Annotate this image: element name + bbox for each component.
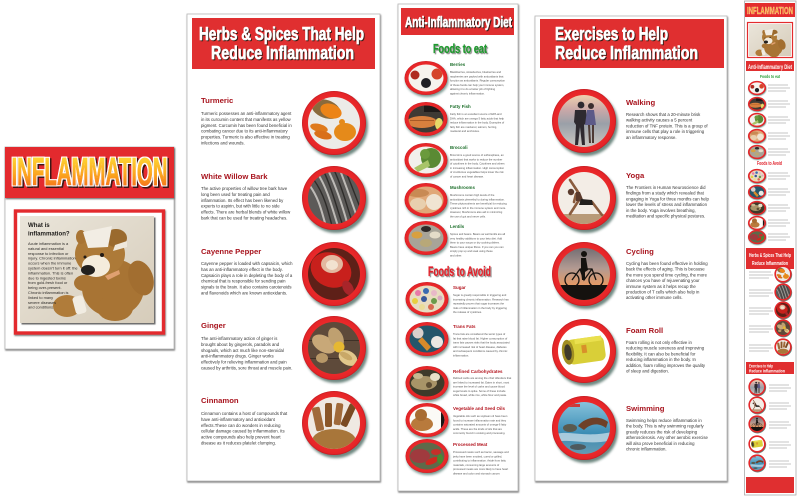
item: walking: reduction of TNF protein. This is a group of (626, 123, 708, 128)
item: broccoli: of cruciferous vegetables helps lower the risk (450, 170, 504, 174)
item: refined carbohydrates: white bread, white rice, white flour and pasta. (453, 393, 507, 397)
text: what is inflammation: Chronic inflammation is (28, 290, 68, 295)
item: trans fats: fat that raise blood fat. Higher consumption of (453, 336, 507, 340)
item: berries: Berries (450, 62, 466, 67)
thumbnail header: exercises: Reduce Inflammation (749, 368, 785, 374)
item: walking: Research shows that a 20-minute brisk (626, 112, 701, 117)
item: broccoli: of cancer and heart disease. (450, 174, 484, 178)
item: fatty fish: Fatty Fish (450, 104, 471, 109)
item: mushrooms (404, 183, 507, 219)
item: turmeric: combating cancer due to its anti-inflammatory (201, 129, 289, 134)
item: turmeric: Turmeric possesses an anti-inflammatory agent (201, 111, 292, 116)
item: cinnamon: effects.These can do wonders in reducing (201, 423, 281, 428)
item: fatty fish: Fatty fish is an excellent source of EPA and (450, 112, 502, 116)
item: berries: Blackberries, strawberries, blueberries and (450, 70, 501, 74)
item: foam roll: addition, foam rolling improves the quality (626, 363, 706, 368)
item: lentils: Beans have unique fibres. If you can you can (450, 245, 504, 249)
item: mushrooms: antioxidants phenethyl to during inflammation. (450, 197, 505, 201)
item: cinnamon (201, 391, 368, 458)
item: swimming: Swimming helps reduce inflammation in (626, 418, 702, 423)
item: refined carbohydrates: Refined carbs are among the chief offenders that (453, 376, 511, 380)
item: broccoli: Broccoli is a good source of sulforaphane, an (450, 153, 504, 157)
panel: anti-inflammatory diet (398, 4, 518, 491)
item: foam roll: reducing muscle soreness and improving (626, 346, 705, 351)
thumbnail: herb circles (749, 265, 792, 356)
item: sugar: repeatedly proven that sugar increases the (453, 302, 504, 306)
item: yoga: lower the levels of stress and inflammation (626, 202, 708, 207)
header band: exercises: Exercises to Help (555, 24, 668, 44)
item: broccoli: of cytokines in the body. Cytokines and others (450, 162, 505, 166)
item: ginger: effectively for relieving inflammation and pain (201, 360, 287, 365)
text: what is inflammation: response to infection or (28, 251, 69, 256)
item: foam roll: reducing inflammation in the body. In (626, 357, 697, 362)
item: sugar: increasing chronic inflammation. Research has (453, 297, 509, 301)
item: mushrooms: the use of gut and nerve cells. (450, 214, 486, 218)
item: foam roll: Foam Roll (626, 326, 663, 335)
item: foam roll (552, 319, 706, 386)
text: what is inflammation: inflammation. This is often (28, 270, 73, 275)
item: refined carbohydrates: Refined Carbohydrates (453, 369, 503, 374)
item: vegetable and seed oils: Vegetable oils such as soybean oil have been (453, 414, 508, 418)
item: cycling: the more you spend time cycling, the more (626, 272, 708, 277)
item: mushrooms: Mushrooms contain high levels of the (450, 193, 495, 197)
item: vegetable and seed oils: Vegetable and Seed Oils (453, 406, 506, 411)
item: white willow bark: bark that can be used for treating headaches. (201, 216, 287, 220)
item: cinnamon: cellular damage caused by inflammation. Its (201, 429, 285, 434)
item: vegetable and seed oils: acids. These are the kinds of oils that are (453, 427, 502, 431)
item: white willow bark (201, 166, 368, 233)
item: white willow bark: long been used for treating pain and (201, 192, 270, 197)
item: foam roll: Foam rolling is not only effective in (626, 340, 692, 345)
item: processed meat: disease and colon and stomach cancer. (453, 472, 500, 476)
thumbnail: foods to avoid ovals (748, 169, 790, 245)
thumbnail header: exercises (746, 362, 794, 374)
item: swimming (552, 396, 709, 463)
panel: inflammation poster (5, 147, 174, 349)
item: cayenne pepper: Capsaicin plays a role in depleting the body of a (201, 273, 293, 278)
item: cycling: activating other immune cells. (626, 295, 683, 300)
thumbnail: foods to eat ovals (748, 81, 790, 160)
header band: herbs and spices: Herbs & Spices That Help (199, 24, 364, 44)
text: what is inflammation: Acute inflammation is a (28, 241, 69, 246)
item: white willow bark: experts to aspirin, but with little to no side (201, 204, 280, 209)
item: refined carbohydrates: sugar levels to spike. Some of these include (453, 389, 506, 393)
item: lentils: them to your soups or dry cooking dishes. (450, 241, 500, 245)
item: swimming: the body. This is why swimming regularly (626, 424, 705, 429)
item: turmeric: properties. Turmeric is also effective in treating (201, 135, 290, 140)
item: ginger: Ginger (201, 321, 226, 330)
item: broccoli: antioxidant that works to reduce the number (450, 157, 502, 161)
item: trans fats: with increased risk of heart disease, diabetes (453, 345, 507, 349)
header band: diet (401, 8, 514, 35)
item: fatty fish (404, 102, 504, 138)
thumbnail heading: foods to eat: Foods to eat (760, 74, 780, 79)
item: processed meat: Processed Meat (453, 442, 488, 447)
item: berries: function as antioxidants. Regular consumption (450, 79, 505, 83)
text: what is inflammation: inflammation? (28, 230, 70, 237)
heading: foods to eat: Foods to eat (433, 42, 488, 56)
item: yoga: The Frontiers in Human Neuroscience did (626, 185, 706, 190)
item: mushrooms: However, Mushrooms also aid in minimizing (450, 210, 503, 214)
item: broccoli: in increasing inflammation. High consumption (450, 166, 505, 170)
item: cinnamon: Cinnamon (201, 396, 239, 405)
item: walking (552, 89, 708, 156)
text: what is inflammation: occurs when the immune (28, 261, 71, 266)
item: foam roll: of sleep and digestion. (626, 368, 669, 374)
item: berries (404, 61, 505, 97)
thumbnail header: herbs (746, 248, 794, 269)
header band: inflammation (5, 147, 174, 198)
item: cinnamon: Cinnamon contains a host of compounds that (201, 411, 288, 416)
text: what is inflammation: natural and essential (28, 246, 64, 251)
item: walking: Walking (626, 98, 655, 107)
item: refined carbohydrates (406, 366, 511, 402)
item: mushrooms: cytokines rich in the immune system and more. (450, 206, 506, 210)
item: cycling: chances you have of rejuvenating your (626, 278, 700, 283)
item: lentils: very healthy additions to your keto diet. Add (450, 236, 502, 240)
item: processed meat: Processed meats such as bacon, sausage and (453, 450, 509, 454)
item: cycling: Cycling has been found effective in holding (626, 261, 708, 266)
item: sugar: Sugar (453, 285, 466, 290)
thumbnail heading: foods to avoid: Foods to Avoid (757, 161, 782, 167)
thumbnail header: exercises: Exercises to Help (749, 364, 773, 368)
item: ginger: The anti-inflammatory action of ginger is (201, 336, 277, 341)
item: turmeric: pigment. Curcumin has been found beneficial in (201, 123, 292, 128)
item: cycling (552, 242, 708, 309)
text: what is inflammation: due to ingested toxins (28, 275, 66, 280)
item: berries: of these foods can help your immune system, (450, 83, 504, 87)
item: foam roll: flexibility. It can also be beneficial for (626, 351, 696, 356)
header band: herbs and spices (192, 18, 375, 69)
item: mushrooms: These phytonutrients are beneficial for reducing (450, 202, 507, 206)
item: walking: an inflammatory response. (626, 135, 677, 140)
item: cayenne pepper: signals to the brain. It also contains carotenoids (201, 285, 292, 290)
item: ginger: caused by arthritis, sore throat and muscle pain. (201, 366, 292, 370)
item: cycling: back the effects of aging. This is because (626, 267, 705, 272)
item: white willow bark: White Willow Bark (201, 172, 268, 181)
item: swimming: atherosclerosis. Any other aerobic exercise (626, 435, 709, 440)
item: lentils: Spices and beans. Beans as well lentils are all (450, 232, 506, 236)
thumbnail: exercise circles (748, 378, 791, 472)
item: berries: allowing it to do a better job of fighting (450, 87, 496, 91)
item: fatty fish: DHA, which are omega-3 fatty acids that help (450, 116, 504, 120)
item: vegetable and seed oils: found to increase inflammation rate and they (453, 418, 507, 422)
text: what is inflammation: linked to many (28, 295, 53, 300)
item: cayenne pepper: Cayenne Pepper (201, 247, 261, 256)
header band: diet: Anti-Inflammatory Diet (405, 14, 512, 31)
item: lentils: Lentils (450, 224, 465, 229)
text: what is inflammation: and conditions. (28, 305, 54, 310)
item: processed meat: jerky have been smoked, cured or grilled, (452, 454, 502, 458)
icon: bandaged teddy bear (53, 226, 158, 321)
item: mushrooms: Mushrooms (450, 185, 475, 190)
item: trans fats: Trans Fats (453, 324, 476, 329)
item: broccoli: Broccoli (450, 145, 468, 150)
item: sugar: risks of inflammation in the body by triggering (453, 306, 507, 310)
item: yoga: Yoga (626, 171, 645, 180)
item: yoga: in the body. Yoga involves breathing, (626, 208, 696, 213)
item: turmeric (201, 91, 368, 158)
item: cayenne pepper: and flavonoids which are known antioxidants. (201, 290, 287, 296)
text: what is inflammation: What is (28, 222, 50, 229)
item: processed meat: processed meats are more likely to have heart (453, 467, 508, 471)
item: refined carbohydrates: increase the level of carbs and cause blood (453, 385, 505, 389)
panel: exercises (535, 16, 727, 481)
framed teddy bear image (16, 211, 164, 333)
thumbnail footer band (746, 477, 794, 493)
item: swimming: Swimming (626, 404, 665, 413)
item: cayenne pepper: chemical that is responsible for sending pain (201, 279, 286, 284)
text: what is inflammation: severe diseases (28, 300, 56, 305)
item: ginger (201, 316, 368, 383)
item: turmeric: Turmeric (201, 96, 234, 105)
header band: herbs and spices: Reduce Inflammation (211, 43, 354, 63)
item: cycling: production of T cells which also help in (626, 290, 700, 294)
thumbnail header: diet (746, 61, 794, 71)
item: trans fats: Trans fats are considered the worst types of (453, 332, 505, 336)
item: turmeric: infections and wounds. (201, 140, 245, 146)
item: ginger: shogaols, which act much like non-steroidal (201, 348, 284, 353)
title: INFLAMMATION (12, 151, 168, 194)
item: broccoli (404, 143, 505, 179)
item: sugar (406, 282, 509, 318)
item: yoga: meditation and specific physical postures. (626, 214, 705, 218)
item: swimming: chronic inflammation. (626, 446, 667, 452)
item: vegetable and seed oils (406, 403, 508, 439)
panel: full poster thumbnail (744, 1, 796, 495)
item: vegetable and seed oils: contains saturated amounts of omega-6 fatty (453, 423, 507, 427)
item: cinnamon: active compounds also help prevent heart (201, 435, 281, 440)
item: white willow bark: inflammation. Its effect has been likened by (201, 198, 284, 203)
header band: exercises: Reduce Inflammation (555, 43, 698, 63)
item: cayenne pepper: Cayenne pepper is loaded with capsaicin, which (201, 261, 293, 266)
item: yoga: findings from a study which revealed that (626, 191, 705, 196)
item: processed meat: contributing to inflammation. Aside from fatty (453, 459, 507, 463)
text: what is inflammation: from gold-fresh food or (28, 280, 68, 285)
item: trans fats: and subsequent conditions caused by chronic (453, 349, 508, 353)
item: fatty fish: reduce inflammation in the body. Examples of (450, 121, 504, 125)
item: cayenne pepper: has an anti-inflammatory effect in the body. (201, 267, 283, 272)
item: white willow bark: effects. There are herbal blends of white willow (201, 210, 291, 215)
item: sugar: Sugar is greatly responsible in triggering and (453, 293, 507, 297)
item: ginger: brought about by gingerols, paradols and (201, 342, 280, 347)
thumbnail header: inflammation (745, 3, 795, 17)
header band: exercises (540, 19, 724, 68)
item: swimming: greatly reduces the risk of developing (626, 429, 698, 434)
item: lentils: and other. (450, 254, 462, 258)
item: cycling: immune system as it helps recup the (626, 284, 696, 289)
item: processed meat: materials, consuming large amounts of (453, 463, 499, 467)
item: cycling: Cycling (626, 247, 654, 256)
item: yoga (552, 166, 710, 233)
item: cinnamon: have anti-inflammatory and antioxidant (201, 417, 276, 422)
item: fatty fish: fatty fish are mackerel, salmon, herring, (450, 125, 497, 129)
item: walking: immune cells that play a role in triggering (626, 129, 705, 134)
item: swimming: will also prove beneficial in reducing (626, 441, 695, 446)
item: turmeric: in its curcumin content that manifests as yellow (201, 117, 291, 122)
item: white willow bark: The active properties of willow tree bark have (201, 186, 288, 191)
text: what is inflammation (28, 222, 78, 310)
item: vegetable and seed oils: commonly found in cooking and processing. (453, 431, 506, 435)
panel: herbs and spices (187, 14, 380, 481)
item: lentils (404, 221, 506, 258)
item: trans fats: trans fats causes risks that the body associated (453, 341, 510, 345)
item: refined carbohydrates: are linked to increased fat. Eaten in short, most (453, 380, 509, 384)
text: what is inflammation: system doesn't turn it off: the (28, 266, 78, 270)
heading: foods to avoid: Foods to Avoid (428, 263, 491, 279)
item: ginger: anti-inflammatory drugs. Ginger works (201, 354, 274, 359)
item: trans fats: inflammation. (453, 354, 469, 358)
item: yoga: engaging in Yoga for three months can help (626, 196, 710, 201)
thumbnail teddy frame (748, 22, 792, 58)
item: trans fats (406, 322, 510, 358)
text: what is inflammation: injury. Chronic inflammation (28, 256, 76, 261)
text: what is inflammation: being over-present. (28, 285, 62, 290)
item: processed meat (406, 439, 509, 476)
item: cayenne pepper (201, 242, 368, 309)
item: berries: against chronic inflammation. (450, 92, 485, 96)
item: berries: raspberries are packed with antioxidants that (450, 74, 504, 78)
item: walking: walking activity causes a 5 percent (626, 118, 693, 123)
item: cinnamon: disease as it reduces platelet clumping. (201, 440, 276, 446)
item: lentils: simply pop up and soak using these (450, 249, 493, 253)
item: fatty fish: mackerel and anchovies. (450, 129, 480, 133)
item: sugar: the release of cytokines. (453, 310, 482, 314)
